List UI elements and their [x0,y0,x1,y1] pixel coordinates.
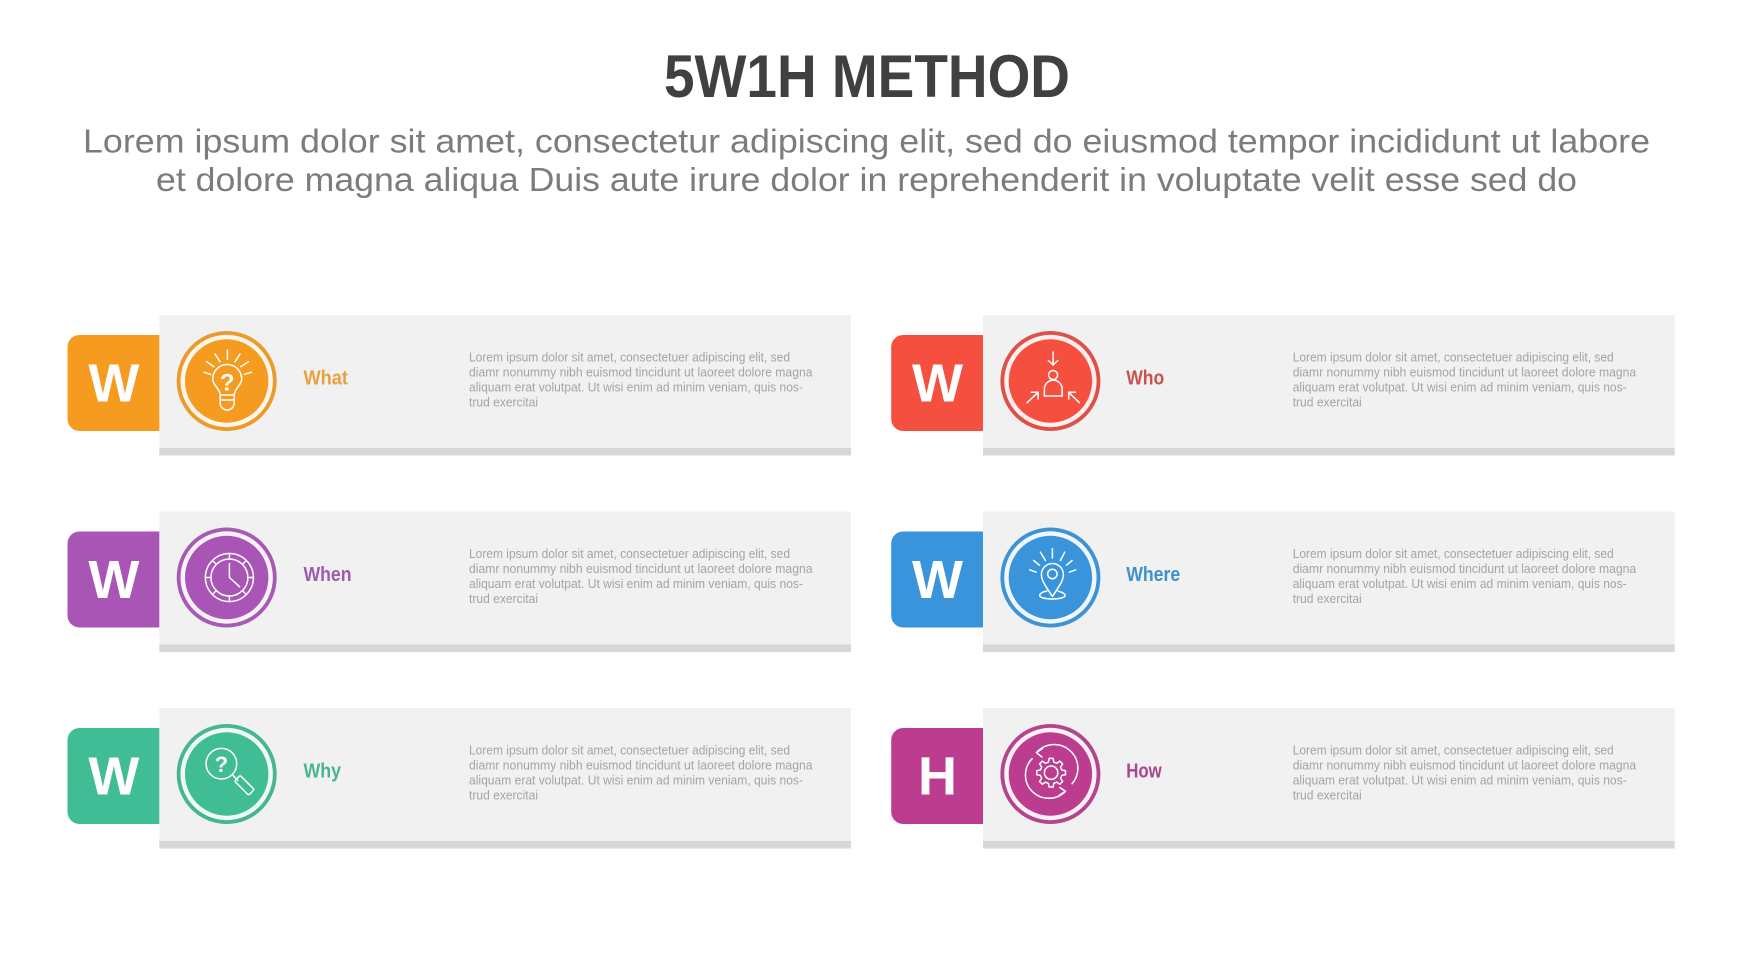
description text: Lorem ipsum dolor sit amet, consectetuer adipiscing elit, sed [1293,744,1614,758]
description text: diamr nonummy nibh euismod tincidunt ut laoreet dolore magna [1293,366,1636,380]
panel: when [68,512,851,652]
description text: diamr nonummy nibh euismod tincidunt ut laoreet dolore magna [1293,759,1636,773]
description text [1293,744,1636,803]
description text: aliquam erat volutpat. Ut wisi enim ad minim veniam, quis nos- [1293,774,1627,788]
letter badge: W: W [88,747,139,807]
letter badge: W [68,335,160,431]
card background [983,512,1675,652]
letter badge: W [68,532,160,628]
description text [469,351,813,410]
subtitle text block [83,123,1650,198]
label: When: When [304,564,352,586]
description text: trud exercitai [1293,789,1362,803]
letter badge: W: W [88,354,139,414]
panel: who [891,315,1675,456]
label: Who: Who [1126,367,1164,389]
description text [469,744,813,803]
icon: light bulb with question mark [177,331,277,431]
label: How: How [1126,760,1162,782]
letter badge: W [68,728,160,824]
description text: Lorem ipsum dolor sit amet, consectetuer adipiscing elit, sed [469,547,790,561]
description text [1293,547,1636,606]
panel: where [891,512,1675,652]
letter badge: W [891,532,983,628]
letter badge: W [891,335,983,431]
description text [1293,351,1636,410]
icon: light bulb with question mark: ? [220,370,235,396]
description text: aliquam erat volutpat. Ut wisi enim ad minim veniam, quis nos- [469,381,803,395]
label: Where: Where [1126,564,1180,586]
label: What: What [304,367,348,389]
icon: magnifier with question mark: ? [215,752,228,777]
description text: trud exercitai [469,396,538,410]
card background [159,315,851,456]
card background [983,708,1675,848]
icon: magnifier with question mark [177,724,277,824]
card background [159,708,851,848]
panel: why [68,708,851,848]
subtitle text block: Lorem ipsum dolor sit amet, consectetur adipiscing elit, sed do eiusmod tempor incididunt ut labore [83,123,1650,160]
letter badge: W: W [88,550,139,610]
description text: trud exercitai [469,592,538,606]
description text: diamr nonummy nibh euismod tincidunt ut laoreet dolore magna [469,759,813,773]
label: Why: Why [304,760,342,782]
description text: Lorem ipsum dolor sit amet, consectetuer adipiscing elit, sed [469,744,790,758]
panel: what [68,315,851,456]
icon: clock [177,528,277,628]
description text: diamr nonummy nibh euismod tincidunt ut laoreet dolore magna [469,562,813,576]
description text: aliquam erat volutpat. Ut wisi enim ad minim veniam, quis nos- [1293,381,1627,395]
description text: Lorem ipsum dolor sit amet, consectetuer adipiscing elit, sed [469,351,790,365]
panel: how [891,708,1675,848]
description text: diamr nonummy nibh euismod tincidunt ut laoreet dolore magna [1293,562,1636,576]
description text: trud exercitai [1293,396,1362,410]
description text: Lorem ipsum dolor sit amet, consectetuer adipiscing elit, sed [1293,351,1614,365]
subtitle text block: et dolore magna aliqua Duis aute irure dolor in reprehenderit in voluptate velit esse sed do [156,161,1577,198]
letter badge: H [891,728,983,824]
description text: aliquam erat volutpat. Ut wisi enim ad minim veniam, quis nos- [469,774,803,788]
description text: diamr nonummy nibh euismod tincidunt ut laoreet dolore magna [469,366,813,380]
description text: aliquam erat volutpat. Ut wisi enim ad minim veniam, quis nos- [469,577,803,591]
description text: Lorem ipsum dolor sit amet, consectetuer adipiscing elit, sed [1293,547,1614,561]
description text: trud exercitai [469,789,538,803]
card background [983,315,1675,456]
letter badge: W: W [912,354,963,414]
letter badge: W: W [912,550,963,610]
icon: person with converging arrows [1000,331,1100,431]
icon: gear with cycle arrows [1000,724,1100,824]
icon: map pin with rays [1000,528,1100,628]
description text: aliquam erat volutpat. Ut wisi enim ad minim veniam, quis nos- [1293,577,1627,591]
letter badge: H: H [918,747,957,807]
description text [469,547,813,606]
card background [159,512,851,652]
description text: trud exercitai [1293,592,1362,606]
title: 5W1H METHOD [664,43,1070,110]
